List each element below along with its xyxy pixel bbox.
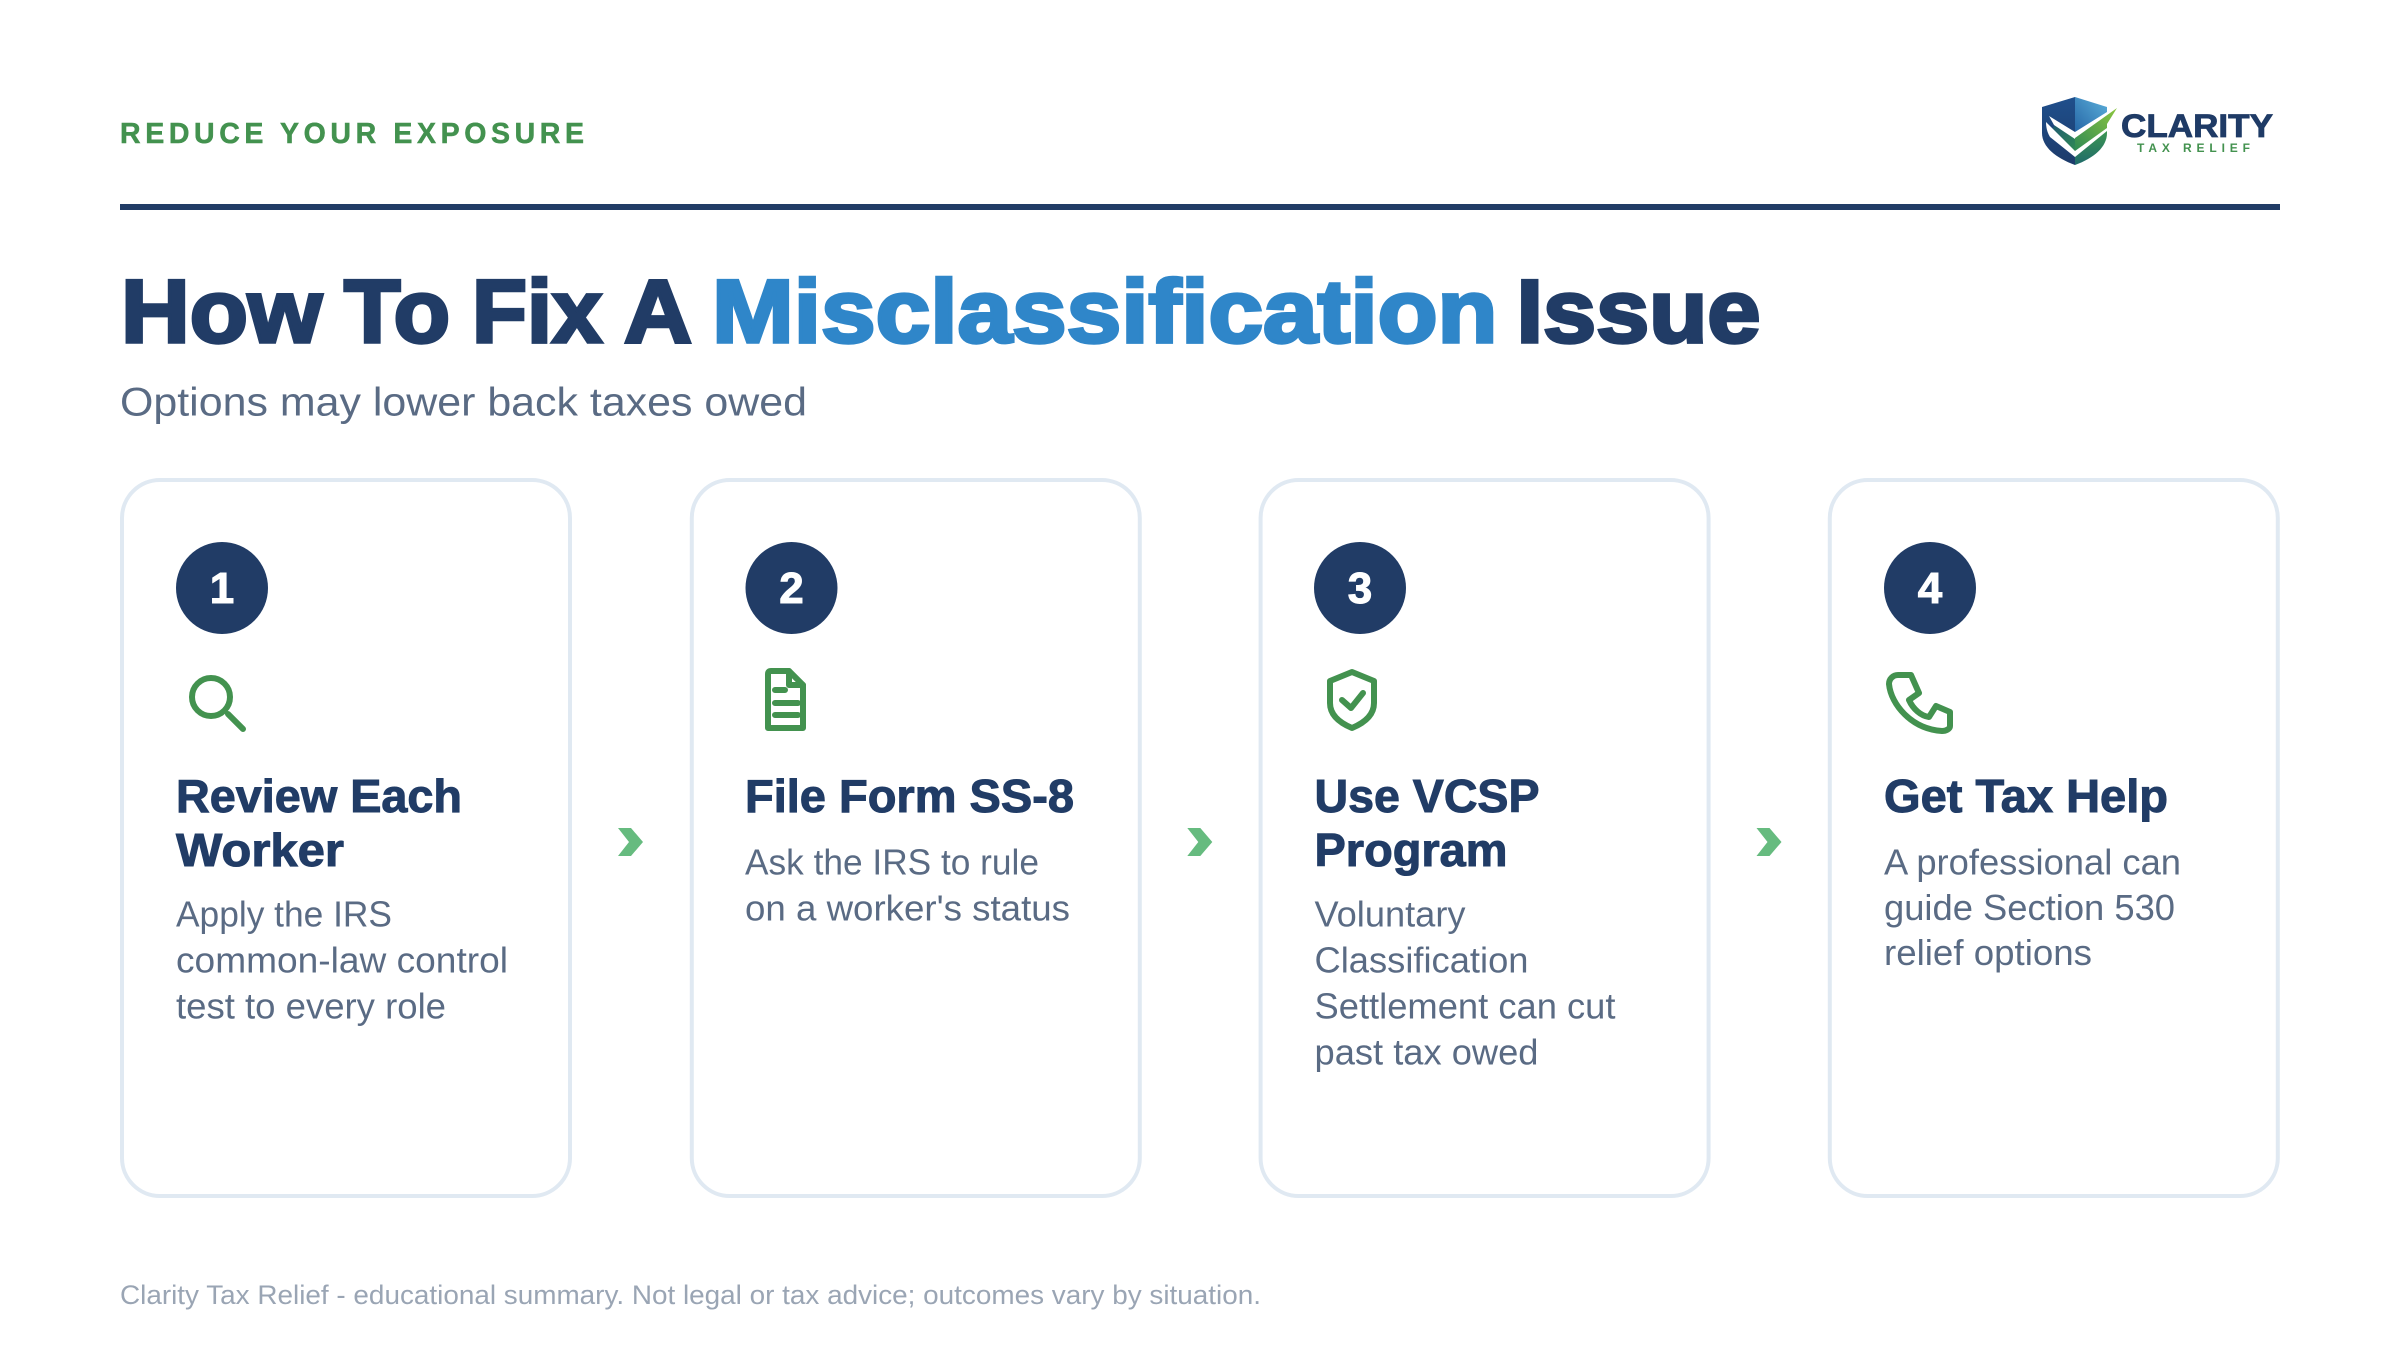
heading: step 1: Review Each bbox=[176, 770, 462, 822]
text: step 3 bbox=[1314, 894, 1616, 1072]
text: step 4 bbox=[1884, 842, 2181, 973]
step number 2: 2 bbox=[779, 564, 804, 613]
arrow 2 bbox=[1187, 828, 1212, 856]
logo tagline: TAX RELIEF bbox=[2137, 141, 2250, 155]
step number 2 bbox=[746, 542, 838, 634]
eyebrow label: REDUCE YOUR EXPOSURE bbox=[120, 118, 584, 150]
step number 3 bbox=[1314, 542, 1406, 634]
step number 1: 1 bbox=[210, 564, 234, 613]
icon: document bbox=[768, 671, 803, 728]
panel: step 3 bbox=[1261, 480, 1709, 1196]
heading: step 3: Use VCSP bbox=[1314, 770, 1540, 822]
step number 4 bbox=[1884, 542, 1976, 634]
text: step 1: common-law control bbox=[176, 940, 508, 980]
step number 1 bbox=[176, 542, 268, 634]
panel: step 4 bbox=[1830, 480, 2278, 1196]
text: step 3: Classification bbox=[1314, 940, 1528, 980]
text: step 3: Settlement can cut bbox=[1314, 986, 1616, 1026]
title: To bbox=[344, 261, 450, 361]
arrow 1 bbox=[618, 828, 643, 856]
icon: magnifying glass bbox=[192, 678, 243, 729]
text: step 4: guide Section 530 bbox=[1884, 887, 2175, 928]
logo: Clarity Tax Relief bbox=[2042, 97, 2273, 165]
logo wordmark: CLARITY bbox=[2121, 108, 2273, 144]
title: How bbox=[121, 261, 323, 361]
text: step 3: Voluntary bbox=[1314, 894, 1466, 934]
heading: step 3 bbox=[1314, 770, 1540, 876]
arrow 3 bbox=[1756, 828, 1782, 856]
text: step 4: A professional can bbox=[1884, 842, 2181, 882]
text: step 2: Ask the IRS to rule bbox=[745, 842, 1039, 882]
text: step 3: past tax owed bbox=[1314, 1032, 1538, 1072]
icon: shield check bbox=[1330, 672, 1374, 728]
heading: step 1: Worker bbox=[176, 824, 344, 876]
subtitle: Options may lower back taxes owed bbox=[120, 380, 807, 424]
icon: phone bbox=[1889, 675, 1950, 731]
text: step 1: Apply the IRS bbox=[176, 894, 392, 934]
footer disclaimer: Clarity Tax Relief - educational summary. Not legal or tax advice; outcomes vary by situation. bbox=[120, 1280, 1261, 1310]
text: step 1 bbox=[176, 894, 508, 1026]
title bbox=[121, 261, 1760, 361]
heading: step 2: File Form SS-8 bbox=[745, 770, 1074, 822]
header rule bbox=[120, 204, 2280, 210]
step number 3: 3 bbox=[1348, 564, 1372, 613]
step number 4: 4 bbox=[1918, 564, 1943, 613]
icon: logo shield bbox=[2042, 97, 2117, 165]
heading: step 1 bbox=[176, 770, 462, 876]
title: Issue bbox=[1516, 261, 1760, 361]
title: Fix bbox=[472, 261, 602, 361]
text: step 2 bbox=[745, 842, 1070, 928]
text: step 2: on a worker's status bbox=[745, 888, 1070, 928]
panel: step 2 bbox=[692, 480, 1140, 1196]
heading: step 3: Program bbox=[1314, 824, 1508, 876]
text: step 4: relief options bbox=[1884, 932, 2092, 973]
heading: step 4: Get Tax Help bbox=[1884, 770, 2168, 822]
title: A bbox=[624, 261, 692, 361]
text: step 1: test to every role bbox=[176, 986, 446, 1026]
title: Misclassification bbox=[712, 261, 1498, 361]
panel: step 1 bbox=[122, 480, 570, 1196]
